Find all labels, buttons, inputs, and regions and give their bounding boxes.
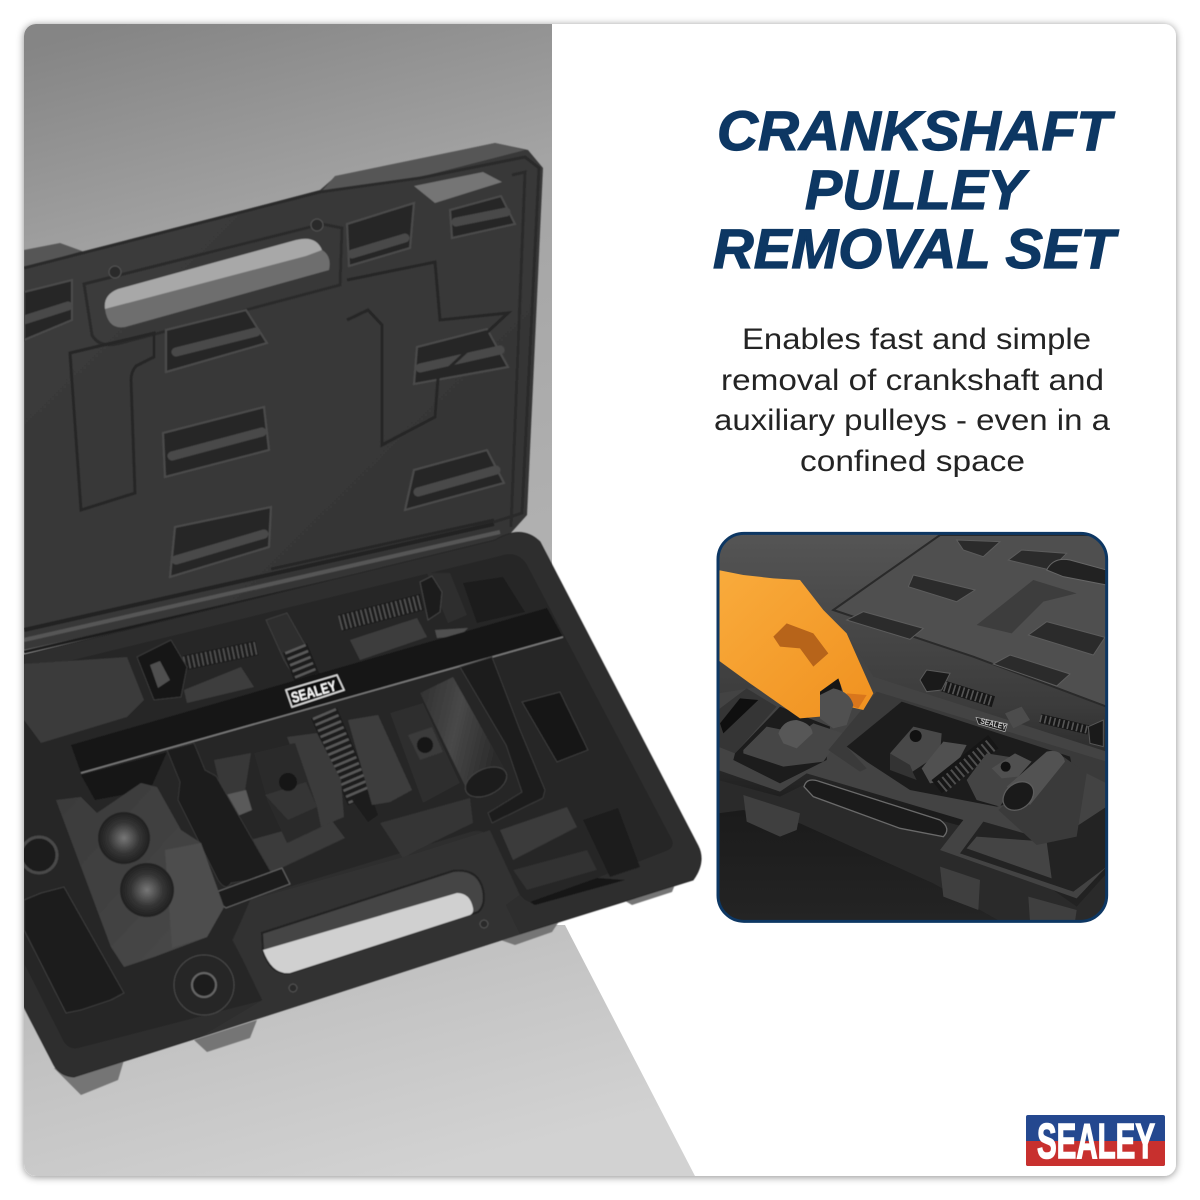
inset left pocket [718, 688, 777, 753]
inset blocks and screw [890, 727, 1065, 816]
photo: open tool case [21, 143, 701, 1095]
support bar [71, 608, 563, 773]
arm shadow pocket [81, 752, 167, 800]
threaded screw, horizontal right [340, 576, 442, 623]
steel sleeve [420, 677, 511, 803]
round pocket, far left [21, 837, 57, 873]
right side mouldings [350, 618, 596, 889]
inset base side wall [720, 790, 1105, 896]
title: CRANKSHAFT [717, 99, 1116, 162]
body text: auxiliary pulleys - even in a [714, 404, 1110, 437]
inset feet [743, 795, 1077, 921]
centre mouldings [214, 753, 345, 878]
tray interior [71, 594, 584, 957]
lid recesses [24, 196, 515, 577]
lid handle grip [105, 250, 330, 327]
case lid shell [24, 143, 543, 650]
hinge grooves [24, 524, 500, 652]
bar-shaped block [348, 715, 412, 805]
inset upper screws [920, 670, 1103, 747]
inset handle slot [804, 780, 947, 837]
threaded screw, vertical [266, 613, 378, 822]
inset bar badge: SEALEY [980, 717, 1008, 732]
washer [174, 955, 234, 1015]
body text: Enables fast and simple [742, 323, 1091, 356]
puller arm, far left [24, 887, 124, 1013]
lid handle hole [105, 239, 322, 309]
inset glove finger shadow [773, 623, 828, 667]
puller arm, left foot [208, 868, 290, 908]
left moulded block [56, 783, 224, 967]
base handle with slot [255, 831, 514, 1000]
inset knuckle highlight [847, 693, 867, 708]
body text: confined space [800, 445, 1025, 478]
body text: removal of crankshaft and [721, 364, 1104, 397]
panel: left grey backdrop [24, 24, 695, 1176]
case feet [54, 872, 680, 1095]
upper-left moulded pad [184, 667, 254, 703]
title [713, 99, 1120, 280]
lid moulded ridges [70, 262, 508, 569]
block with bolt hole, centre-right [408, 726, 444, 760]
threaded screw, horizontal left [137, 640, 257, 700]
tray moulded platform [24, 657, 144, 743]
badge text on bar: SEALEY [289, 678, 338, 707]
steel cylinder, bottom [120, 863, 174, 917]
title: PULLEY [805, 158, 1030, 221]
photo inset: gloved hand in case [718, 533, 1107, 921]
puller arm, right [460, 657, 545, 823]
tray right pockets [463, 577, 640, 905]
case base shell [24, 532, 701, 1077]
inset puller bar and arm [828, 692, 1107, 783]
title: REMOVAL SET [713, 217, 1120, 280]
inset right pocket [960, 807, 1107, 892]
inset gap behind fingers [807, 663, 843, 707]
puller arm, left [167, 743, 274, 887]
inset glove [718, 570, 873, 718]
lid recess ridges [24, 212, 506, 560]
block with bolt hole, centre-left [266, 733, 344, 842]
steel cylinder, top [98, 812, 150, 864]
inset base top [718, 633, 1107, 898]
inset lid [833, 535, 1107, 707]
body text [714, 323, 1110, 478]
inset steel pins [778, 688, 853, 748]
